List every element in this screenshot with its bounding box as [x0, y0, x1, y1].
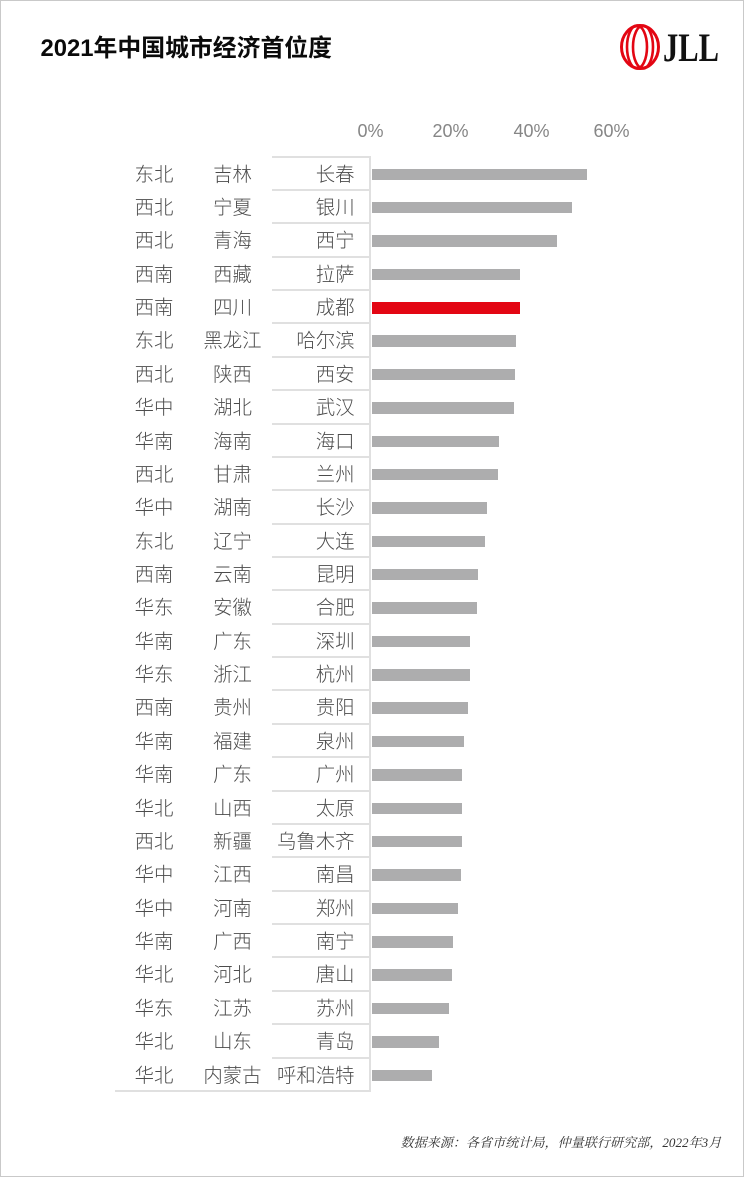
row: 泉州	[135, 723, 464, 753]
row: 西安: 西安	[316, 364, 354, 386]
row: 乌鲁木齐	[135, 823, 462, 853]
row: 成都: 西南	[135, 297, 173, 319]
row: 银川	[135, 189, 572, 219]
row: 深圳: 深圳	[316, 631, 354, 653]
row: 武汉	[135, 389, 514, 419]
row: 呼和浩特: 内蒙古	[203, 1064, 262, 1086]
row: 长沙: 长沙	[316, 497, 354, 519]
row: 长沙: 湖南	[213, 497, 252, 519]
row: 大连: 东北	[135, 531, 173, 553]
axis labels: 20%	[432, 120, 469, 140]
row: 兰州	[135, 456, 498, 486]
axis labels	[357, 120, 630, 140]
row: 大连	[135, 523, 485, 553]
row: 南昌	[135, 856, 461, 886]
row: 西安: 陕西	[213, 364, 252, 386]
row: 太原: 太原	[316, 798, 354, 820]
row: 昆明	[135, 556, 478, 586]
row: 武汉: 武汉	[316, 397, 354, 419]
row: 广州: 广州	[316, 764, 354, 786]
row: 呼和浩特: 呼和浩特	[277, 1064, 354, 1086]
row: 银川: 宁夏	[213, 197, 252, 219]
row: 贵阳: 西南	[135, 697, 173, 719]
row: 苏州: 华东	[135, 998, 173, 1020]
row: 长春: 东北	[135, 164, 173, 186]
row: 南宁: 华南	[135, 931, 173, 953]
row: 西宁	[135, 222, 557, 252]
row: 深圳	[135, 623, 470, 653]
row: 苏州: 江苏	[213, 998, 252, 1020]
row: 合肥: 华东	[135, 597, 173, 619]
row: 西安: 西北	[135, 364, 173, 386]
row: 郑州: 华中	[135, 898, 173, 920]
row: 唐山: 河北	[213, 964, 252, 986]
row: 深圳: 广东	[213, 631, 252, 653]
row: 郑州: 河南	[213, 898, 252, 920]
row: 太原	[135, 790, 462, 820]
row: 杭州	[135, 656, 470, 686]
row: 杭州: 华东	[135, 664, 173, 686]
row: 青岛: 山东	[213, 1031, 252, 1053]
row: 太原: 华北	[135, 798, 173, 820]
row: 大连: 辽宁	[213, 531, 252, 553]
row: 海口: 华南	[135, 430, 173, 452]
row: 乌鲁木齐: 新疆	[213, 831, 252, 853]
axis labels: 60%	[593, 120, 630, 140]
row: 昆明: 西南	[135, 564, 173, 586]
row: 南宁: 南宁	[316, 931, 354, 953]
row: 长春	[135, 156, 587, 186]
row: 贵阳: 贵州	[213, 697, 252, 719]
row: 成都: 成都	[316, 297, 354, 319]
row: 西宁: 西北	[135, 230, 173, 252]
row: 长沙: 华中	[135, 497, 173, 519]
row: 广州: 广东	[213, 764, 252, 786]
axis labels: 40%	[513, 120, 550, 140]
row: 合肥: 安徽	[213, 597, 252, 619]
axis labels: 0%	[357, 120, 384, 140]
row: 广州: 华南	[135, 764, 173, 786]
row: 兰州: 甘肃	[213, 464, 252, 486]
row: 南昌: 江西	[213, 864, 252, 886]
row: 兰州: 兰州	[316, 464, 354, 486]
row: 长春: 长春	[316, 164, 354, 186]
row: 南宁: 广西	[213, 931, 252, 953]
row: 苏州: 苏州	[316, 998, 354, 1020]
row: 昆明: 昆明	[316, 564, 354, 586]
row: 拉萨	[135, 256, 520, 286]
row: 哈尔滨: 哈尔滨	[296, 330, 354, 352]
row: 海口: 海口	[316, 430, 354, 452]
row: 呼和浩特	[135, 1057, 432, 1086]
row: 拉萨: 西南	[135, 264, 173, 286]
row: 哈尔滨: 黑龙江	[203, 330, 262, 352]
row: 南昌: 华中	[135, 864, 173, 886]
row: 泉州: 泉州	[316, 731, 354, 753]
row: 成都	[135, 289, 520, 319]
row: 深圳: 华南	[135, 631, 173, 653]
row: 合肥: 合肥	[316, 597, 354, 619]
row: 乌鲁木齐: 乌鲁木齐	[277, 831, 354, 853]
row: 杭州: 浙江	[213, 664, 252, 686]
row: 太原: 山西	[213, 798, 252, 820]
row: 郑州: 郑州	[316, 898, 354, 920]
row: 银川: 西北	[135, 197, 173, 219]
row: 武汉: 湖北	[213, 397, 252, 419]
row: 广州	[135, 756, 462, 786]
row: 泉州: 华南	[135, 731, 173, 753]
row: 杭州: 杭州	[316, 664, 354, 686]
row: 海口: 海南	[213, 430, 252, 452]
row: 唐山: 华北	[135, 964, 173, 986]
row: 兰州: 西北	[135, 464, 173, 486]
row: 贵阳: 贵阳	[316, 697, 354, 719]
row: 哈尔滨: 东北	[135, 330, 173, 352]
source note: 数据来源：各省市统计局，仲量联行研究部，2022年3月	[400, 1134, 721, 1150]
row: 拉萨: 西藏	[213, 264, 252, 286]
row: 呼和浩特: 华北	[135, 1064, 173, 1086]
row: 西安	[135, 356, 515, 386]
row: 拉萨: 拉萨	[316, 264, 354, 286]
row: 青岛: 青岛	[316, 1031, 354, 1053]
row: 大连: 大连	[316, 531, 354, 553]
row: 西宁: 西宁	[316, 230, 354, 252]
row: 苏州	[135, 990, 449, 1020]
row: 唐山: 唐山	[316, 964, 354, 986]
row: 南宁	[135, 923, 453, 953]
row: 长春: 吉林	[213, 164, 252, 186]
title: 2021年中国城市经济首位度	[40, 34, 332, 62]
row: 武汉: 华中	[135, 397, 173, 419]
row: 南昌: 南昌	[316, 864, 354, 886]
row: 西宁: 青海	[213, 230, 252, 252]
row: 银川: 银川	[316, 197, 354, 219]
icon: JLL logo	[620, 24, 718, 70]
row: 唐山	[135, 956, 452, 986]
row: 成都: 四川	[213, 297, 252, 319]
row: 贵阳	[135, 689, 468, 719]
row: 青岛: 华北	[135, 1031, 173, 1053]
row: 合肥	[135, 589, 477, 619]
row: 乌鲁木齐: 西北	[135, 831, 173, 853]
row: 郑州	[135, 890, 458, 920]
row: 泉州: 福建	[213, 731, 252, 753]
row: 海口	[135, 423, 499, 452]
row: 哈尔滨	[135, 322, 516, 352]
row: 长沙	[135, 489, 487, 519]
row: 昆明: 云南	[213, 564, 252, 586]
row: 青岛	[135, 1023, 439, 1053]
